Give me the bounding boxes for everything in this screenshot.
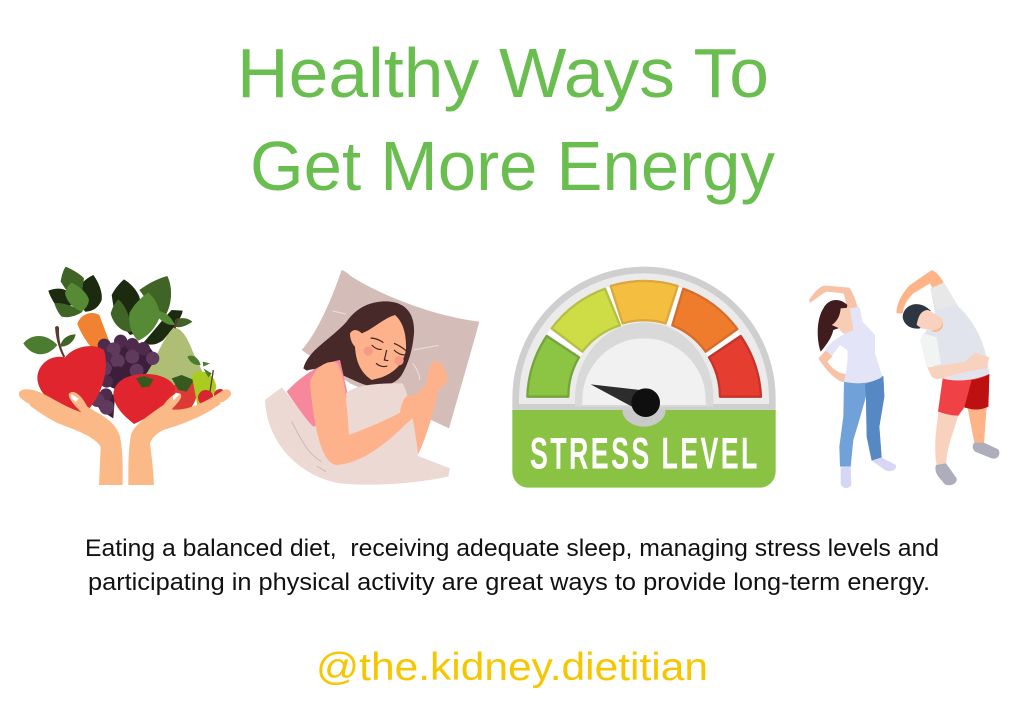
woman shirt [825, 307, 882, 383]
needle hub collar [622, 410, 666, 427]
woman face [832, 307, 853, 334]
lime and cherries [187, 356, 226, 405]
hair [303, 301, 414, 386]
man shorts [938, 374, 989, 416]
dial [575, 322, 713, 407]
fingernails [23, 393, 228, 406]
green label band [512, 410, 776, 488]
man legs [968, 407, 987, 443]
woman raised arm [809, 286, 858, 313]
description text: participating in physical activity are great ways to provide long-term energy. [88, 569, 930, 596]
description text: Eating a balanced diet, receiving adequate sleep, managing stress levels and [85, 535, 939, 562]
grapes [90, 335, 159, 418]
man shoes [935, 443, 999, 485]
title [237, 34, 775, 205]
title: Healthy Ways To [237, 34, 769, 112]
woman left arm [818, 349, 856, 383]
man sleeve [920, 333, 941, 367]
face [350, 315, 406, 380]
icon: stress level gauge [512, 267, 776, 488]
man hair [903, 304, 931, 329]
tomato [113, 374, 175, 424]
woman [809, 286, 896, 488]
carrot [77, 313, 115, 373]
shoulder and arm [310, 362, 424, 465]
strawberry [168, 382, 198, 412]
pillow [302, 270, 479, 428]
dark leaves [48, 275, 183, 345]
man shirt [920, 283, 989, 381]
blanket [265, 387, 450, 485]
needle [591, 384, 660, 417]
woman jeans [839, 376, 884, 467]
woman hair [818, 300, 847, 352]
icon: two people stretching [809, 270, 999, 488]
icon: woman sleeping on a pillow [265, 270, 479, 485]
man neck [932, 318, 943, 332]
gauge label: STRESS LEVEL [530, 428, 760, 478]
raised forearm and fist [410, 361, 447, 454]
man [897, 270, 999, 485]
mid green leaves [54, 267, 192, 332]
left hand [19, 389, 123, 485]
woman shoes [841, 458, 896, 488]
icon: hands holding fruit and vegetables [19, 267, 231, 485]
title: Get More Energy [250, 127, 775, 205]
gauge segments [527, 281, 761, 397]
apple [23, 326, 106, 413]
hugged pillow [346, 383, 418, 455]
right hand [128, 389, 231, 485]
description text [85, 535, 939, 596]
man raised arm [897, 270, 944, 313]
man face [917, 310, 943, 330]
handle: @the.kidney.dietitian [316, 646, 708, 689]
man arm [927, 353, 989, 379]
gauge frame [512, 267, 776, 413]
pear [145, 327, 205, 390]
segment separators [548, 287, 739, 355]
pink top [287, 360, 348, 430]
